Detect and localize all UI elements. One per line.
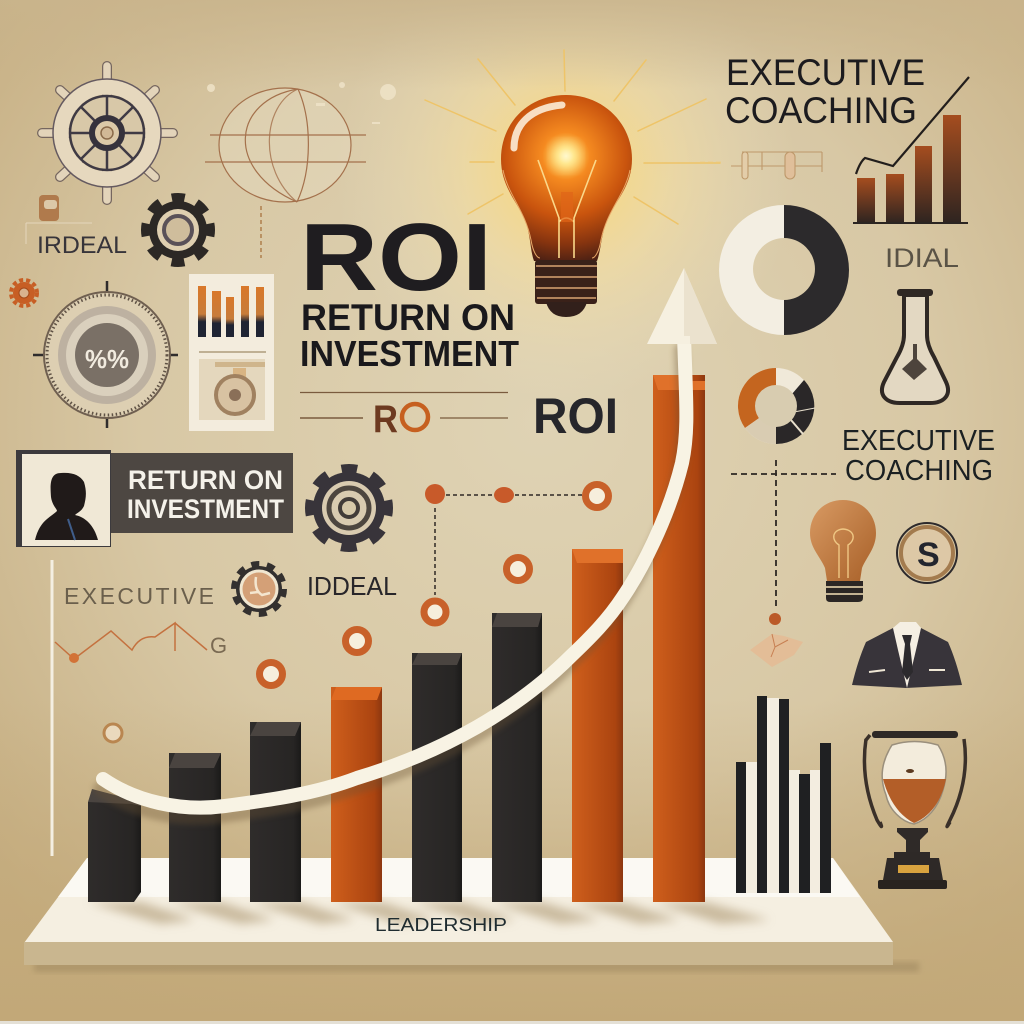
icon: flask: [882, 289, 948, 403]
bulb rays: [425, 50, 720, 224]
bar 6: [492, 613, 542, 902]
subtitle: return on investment: [300, 297, 519, 374]
bar 2: [169, 753, 221, 902]
dotted connector under globe: [260, 206, 262, 258]
heading: executive coaching: COACHING: [725, 90, 917, 131]
icon: business suit: [852, 622, 962, 688]
sparkline with G: G: [210, 633, 227, 658]
icon: dollar coin: S: [917, 536, 940, 574]
rising arrow: [100, 268, 717, 818]
chart: striped bars: [736, 696, 831, 893]
icon: orange ring markers: [260, 484, 608, 686]
decorative hanging dashes: [700, 152, 822, 179]
framed silhouette: [16, 450, 111, 547]
label: portrait with return on investment: [16, 450, 293, 547]
label: portrait with return on investment: RETURN ON: [128, 465, 283, 495]
bulb screw base: [535, 260, 597, 317]
card lower table: [199, 351, 266, 420]
label: LEADERSHIP: LEADERSHIP: [375, 915, 507, 935]
bar 7: [572, 549, 623, 902]
icon: dollar coin: [897, 523, 957, 583]
heading: executive coaching: [725, 52, 925, 131]
bar 3: [250, 722, 301, 902]
icon: orange small gear: [11, 280, 37, 306]
icon: large target gear: [304, 463, 394, 553]
label: IRDEAL: [26, 195, 127, 259]
heading: executive coaching: EXECUTIVE: [726, 52, 925, 93]
bar 4: [331, 687, 382, 902]
label: IDIAL: IDIAL: [885, 243, 959, 273]
label: IRDEAL: IRDEAL: [37, 232, 127, 259]
label: ROI small bold: ROI: [533, 388, 618, 444]
title: ROI: ROI: [300, 204, 492, 311]
icon: crumpled paper with pin: [750, 613, 803, 667]
icon: wireframe globe: [205, 88, 366, 202]
connector: dashed cross lines: [731, 460, 836, 610]
bar 5: [412, 653, 462, 902]
icon: percentage gauge: %%: [85, 344, 129, 374]
bar floor shadows: [88, 902, 770, 924]
label: executive coaching secondary: EXECUTIVE: [842, 425, 995, 457]
bar 1: [88, 789, 141, 902]
rule lines with small RO label: [300, 392, 508, 441]
dark label plate: [110, 453, 293, 533]
icon: ship wheel: [42, 66, 173, 200]
chart: segmented ring: [738, 368, 815, 444]
subtitle: return on investment: INVESTMENT: [300, 333, 519, 374]
icon: trophy hourglass: [864, 731, 965, 889]
connector: dotted line network: [425, 484, 582, 595]
chart: rising mini bars: [853, 77, 969, 223]
icon: dark gear: [141, 193, 215, 267]
icon: percentage gauge: [33, 281, 178, 428]
label: executive thin: EXECUTIVE: [64, 583, 214, 609]
card bars: [198, 286, 264, 337]
label: executive coaching secondary: COACHING: [845, 455, 993, 487]
icon: glowing lightbulb: [425, 50, 720, 317]
icon: small bulb: [810, 500, 876, 602]
icon: small clock gear: [234, 564, 284, 614]
label: IDDEAL: IDDEAL: [307, 571, 397, 601]
bar chart: rising ROI bars: [88, 375, 705, 902]
panel: report card: [189, 274, 274, 431]
rule lines with small RO label: R: [373, 398, 398, 441]
icon: small brass ball: [104, 724, 122, 742]
platform: [24, 858, 919, 972]
sparkline with G: [55, 623, 227, 663]
vertical white pole: [50, 560, 54, 856]
decorative specks: [207, 82, 396, 124]
label: portrait with return on investment: INVESTMENT: [127, 494, 284, 524]
bar 8: [653, 375, 705, 902]
subtitle: return on investment: RETURN ON: [301, 297, 515, 338]
chart: half donut: [719, 205, 849, 335]
label: executive coaching secondary: [842, 425, 995, 487]
